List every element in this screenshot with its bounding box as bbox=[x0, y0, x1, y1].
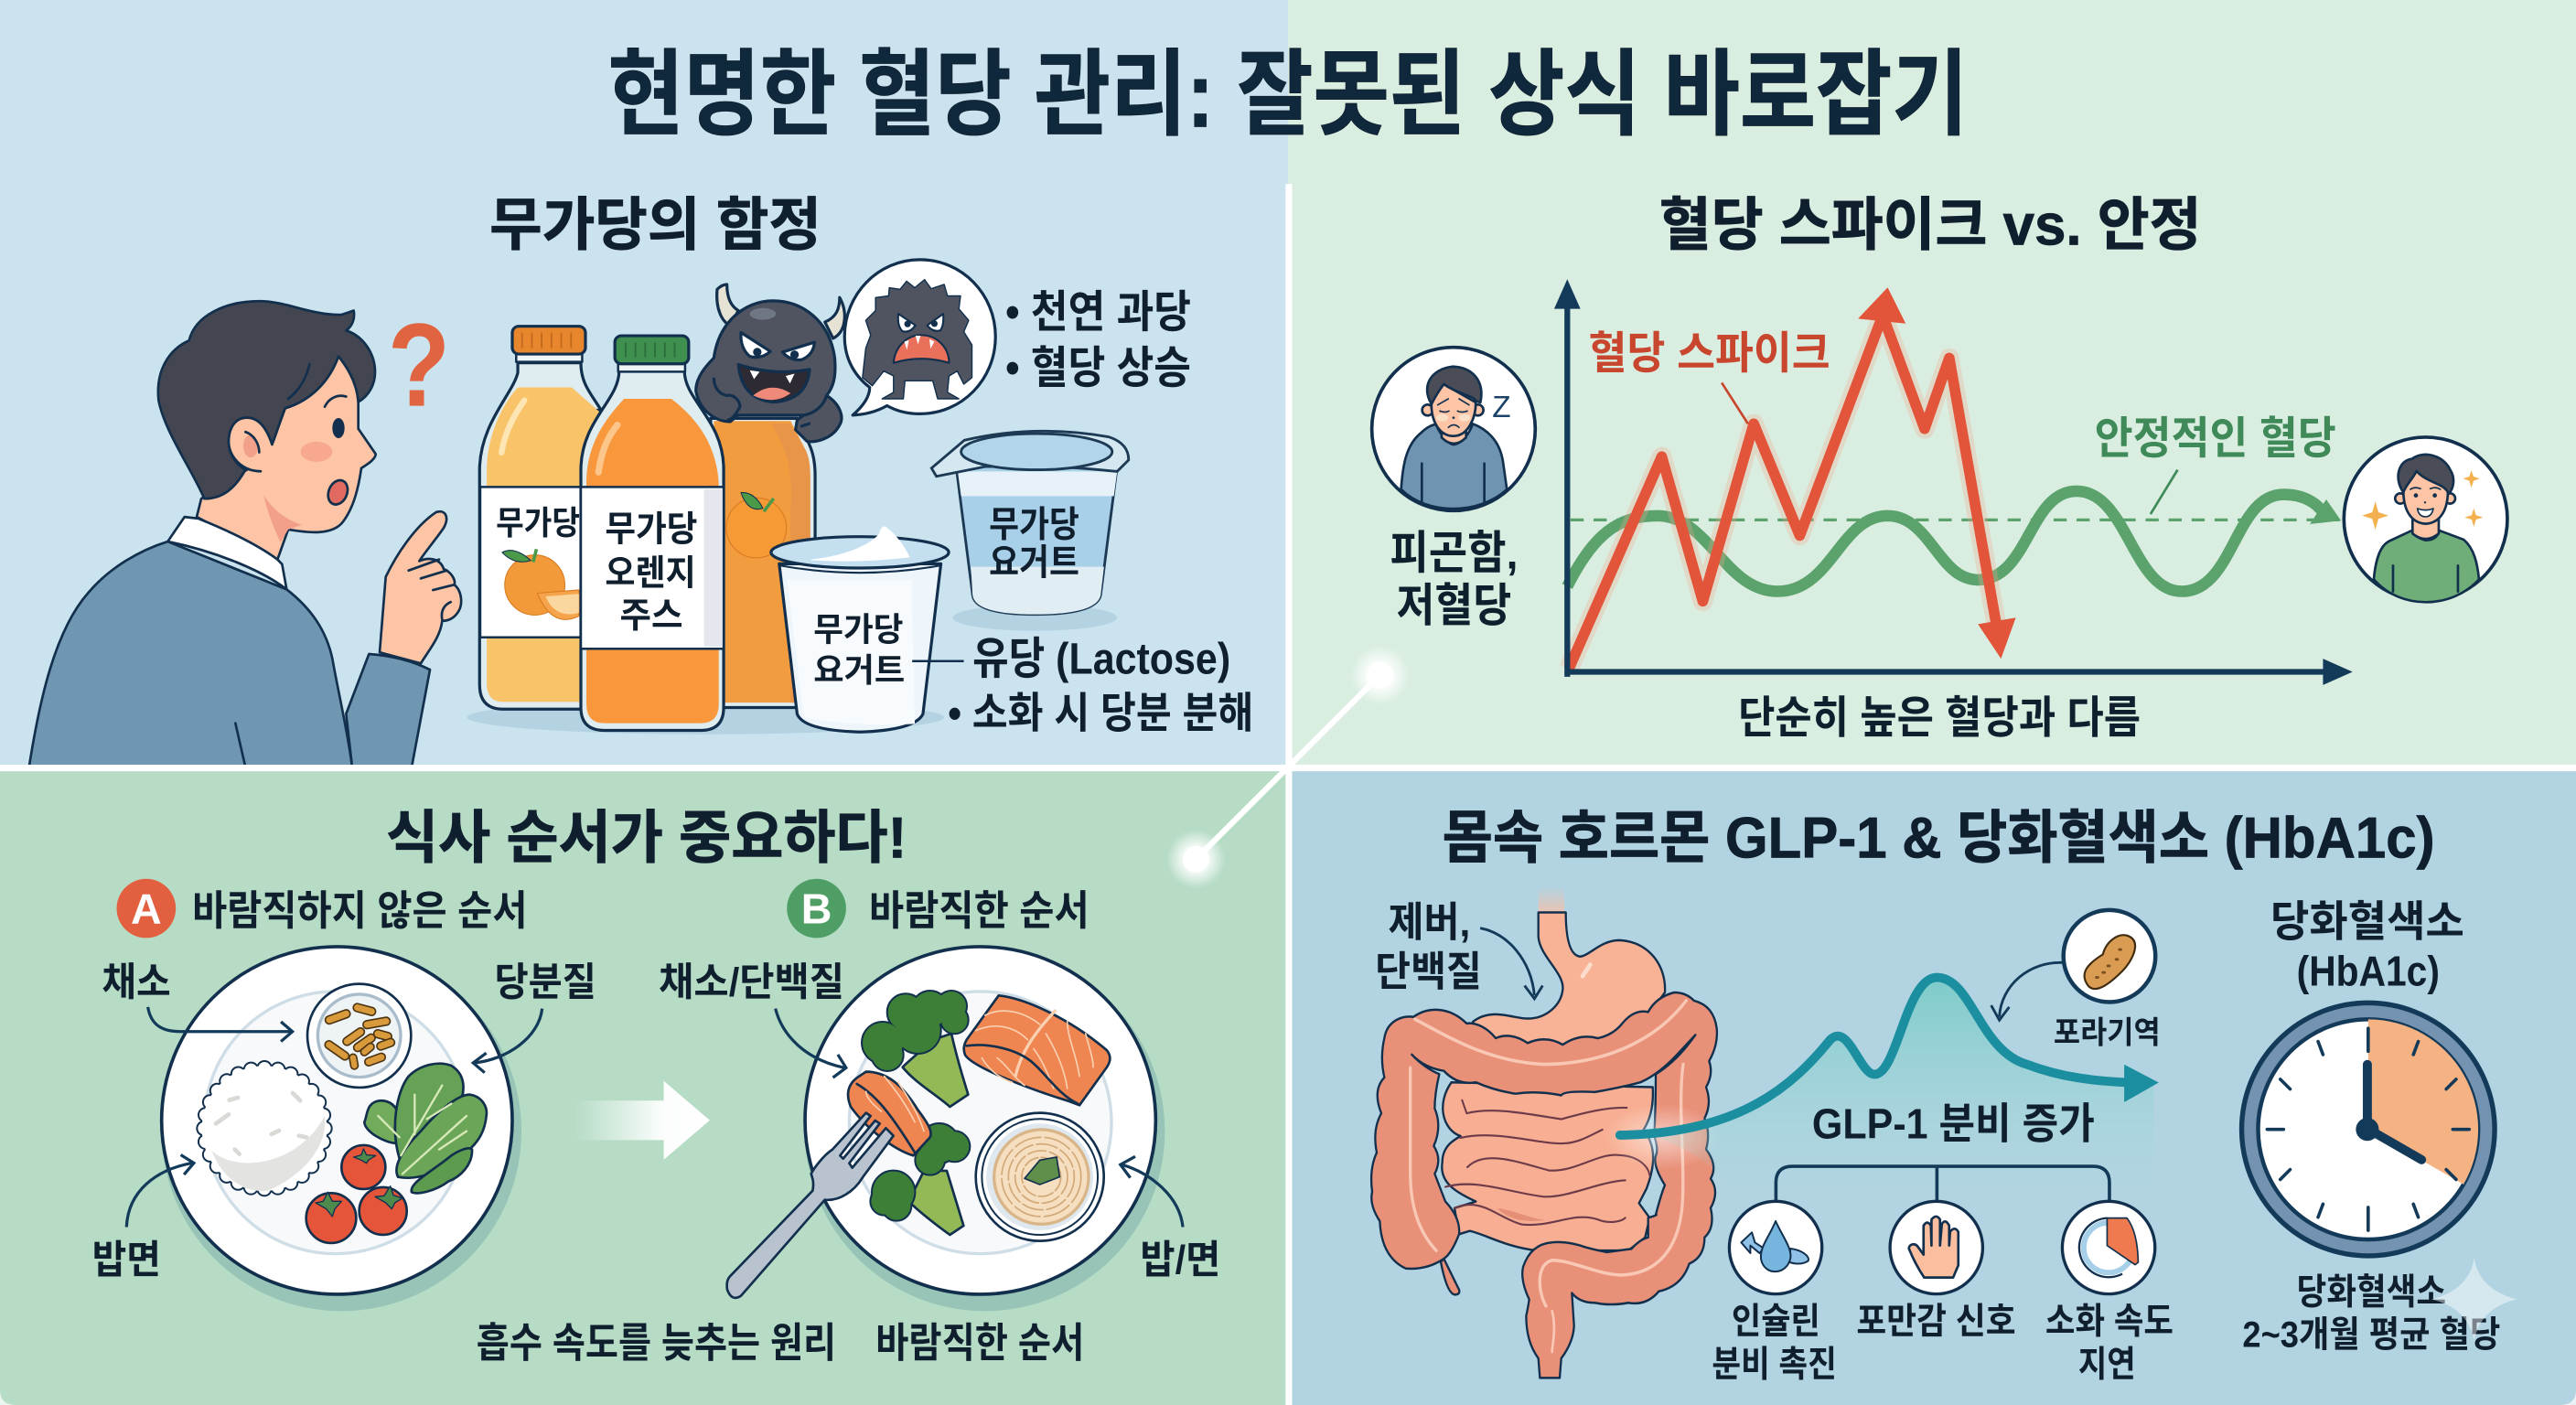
label: digestion speed: 소화 속도 bbox=[2045, 1302, 2174, 1342]
dish: side dish bbox=[307, 984, 411, 1088]
front yogurt cup: 무가당 bbox=[813, 611, 903, 648]
front yogurt cup: 요거트 bbox=[813, 652, 905, 689]
text: blood sugar rise: • 혈당 상승 bbox=[1005, 343, 1191, 392]
text: lactose: 유당 (Lactose) bbox=[972, 634, 1230, 683]
heading: sugar-free trap: 무가당의 함정 bbox=[489, 194, 821, 258]
icon: insulin drop bbox=[1729, 1201, 1822, 1294]
food: rice bbox=[202, 1066, 327, 1191]
label: HbA1c title line 2: (HbA1c) bbox=[2297, 948, 2440, 995]
label: GLP-1 increase: GLP-1 분비 증가 bbox=[1812, 1100, 2095, 1148]
caption: desirable order: 바람직한 순서 bbox=[875, 1319, 1084, 1366]
food: salmon on fork bbox=[848, 1072, 931, 1155]
caption: different from high glucose: 단순히 높은 혈당과 다름 bbox=[1738, 693, 2141, 743]
icon: tired person: Z bbox=[1492, 391, 1511, 424]
label: rice noodle A: 밥면 bbox=[92, 1239, 161, 1282]
connector tree bbox=[1776, 1166, 2109, 1201]
heading: spike vs stable: 혈당 스파이크 vs. 안정 bbox=[1659, 194, 2202, 258]
left juice bottle: 무가당 bbox=[496, 505, 580, 542]
label: spike: 혈당 스파이크 bbox=[1589, 328, 1830, 378]
panel: meal order bbox=[0, 766, 1288, 1405]
decoration: sparkle bbox=[2431, 1259, 2517, 1340]
icon: satiety hand bbox=[1890, 1201, 1982, 1294]
label: vegetable protein: 채소/단백질 bbox=[659, 960, 844, 1004]
centre connector bbox=[1166, 646, 1410, 889]
utensil: fork bbox=[727, 1113, 894, 1298]
badge A: A bbox=[131, 885, 162, 932]
heading: GLP-1 and HbA1c: 몸속 호르몬 GLP-1 & 당화혈색소 (HbA1c) bbox=[1443, 806, 2435, 870]
label: right yogurt: 무가당 bbox=[989, 505, 1079, 545]
illustration: drinks group bbox=[467, 260, 995, 735]
illustration: thinking man bbox=[29, 301, 461, 767]
food: lettuce bbox=[364, 1064, 487, 1193]
subheading A: 바람직하지 않은 순서 bbox=[192, 887, 527, 934]
arrow: pancreas to curve bbox=[1991, 962, 2064, 1020]
chart: GLP-1 curve bbox=[1604, 978, 2159, 1199]
organ: esophagus and stomach bbox=[1473, 912, 1665, 1048]
label: pancreas: 포라기역 bbox=[2054, 1015, 2161, 1050]
arrows: plate A bbox=[126, 1007, 542, 1228]
monster behind bottle bbox=[696, 284, 844, 442]
main title: 현명한 혈당 관리: 잘못된 상식 바로잡기 bbox=[607, 41, 1969, 146]
back bottle bbox=[711, 418, 815, 707]
illustration: plate B bbox=[727, 947, 1165, 1311]
icon: tired person bbox=[1372, 348, 1535, 510]
panel: hormones bbox=[1288, 766, 2576, 1405]
organ: colon bbox=[1371, 992, 1717, 1378]
heading: meal order: 식사 순서가 중요하다! bbox=[386, 806, 907, 870]
label: satiety signal: 포만감 신호 bbox=[1856, 1302, 2016, 1342]
food: salmon large bbox=[964, 995, 1110, 1105]
left juice bottle bbox=[479, 327, 601, 709]
front yogurt cup bbox=[771, 526, 949, 732]
panel: spike vs stable bbox=[1288, 0, 2576, 766]
illustration: digestive system bbox=[1371, 886, 1717, 1378]
middle juice bottle bbox=[581, 336, 724, 730]
badge B: B bbox=[801, 885, 832, 932]
arrow: A to B bbox=[575, 1081, 710, 1160]
label: tired: 피곤함, bbox=[1390, 526, 1518, 578]
label: HbA1c caption line 2: 2~3개월 평균 혈당 bbox=[2242, 1315, 2500, 1356]
label: hypoglycemia: 저혈당 bbox=[1397, 579, 1511, 631]
food: tomatoes bbox=[306, 1145, 407, 1243]
label: insulin line 2: 분비 촉진 bbox=[1712, 1345, 1837, 1385]
label: fiber protein line 2: 단백질 bbox=[1375, 949, 1482, 995]
label: sugar A: 당분질 bbox=[495, 960, 596, 1004]
leader line: lactose bbox=[912, 658, 964, 664]
label: fiber protein: 제버, bbox=[1389, 899, 1470, 946]
caption: absorption principle: 흡수 속도를 늦추는 원리 bbox=[477, 1319, 836, 1366]
label: HbA1c caption: 당화혈색소 bbox=[2297, 1272, 2446, 1313]
chart: glucose curves bbox=[1554, 279, 2353, 685]
label: vegetables A: 채소 bbox=[102, 960, 171, 1004]
illustration: right yogurt cup bbox=[931, 431, 1129, 631]
label: HbA1c title: 당화혈색소 bbox=[2270, 898, 2464, 946]
icon: happy person bbox=[2344, 437, 2507, 602]
label: insulin: 인슐린 bbox=[1732, 1302, 1820, 1342]
badge A bbox=[117, 879, 176, 938]
food: broccoli lower bbox=[871, 1123, 970, 1235]
label: right yogurt line 2: 요거트 bbox=[989, 543, 1079, 584]
organ: small intestine bbox=[1442, 1082, 1653, 1250]
arrow: into stomach bbox=[1480, 928, 1542, 999]
label: digestion speed line 2: 지연 bbox=[2078, 1345, 2136, 1385]
badge B bbox=[787, 879, 846, 938]
organ: appendix bbox=[1441, 1259, 1459, 1294]
icon: clock bbox=[2242, 1003, 2495, 1256]
icon: slow digestion bbox=[2062, 1201, 2155, 1294]
illustration: plate A bbox=[162, 947, 521, 1311]
middle juice bottle: 주스 bbox=[619, 596, 682, 636]
text: digestion: • 소화 시 당분 분해 bbox=[948, 690, 1253, 737]
panel: sugar-free trap bbox=[0, 0, 1288, 767]
icon: pancreas bbox=[2064, 910, 2155, 1002]
text: natural fructose: • 천연 과당 bbox=[1005, 287, 1191, 337]
label: rice/noodle B: 밥/면 bbox=[1140, 1239, 1220, 1282]
icon: question mark: ? bbox=[388, 300, 450, 432]
icon row: effects bbox=[1729, 1201, 2155, 1294]
middle juice bottle: 무가당 bbox=[605, 509, 697, 549]
food: noodle bowl bbox=[976, 1113, 1104, 1241]
speech bubble with monster bbox=[844, 260, 995, 415]
arrows: plate B bbox=[776, 1009, 1183, 1228]
middle juice bottle: 오렌지 bbox=[605, 554, 696, 594]
food: broccoli top bbox=[862, 991, 968, 1107]
label: stable: 안정적인 혈당 bbox=[2095, 414, 2336, 464]
subheading B: 바람직한 순서 bbox=[869, 887, 1089, 934]
